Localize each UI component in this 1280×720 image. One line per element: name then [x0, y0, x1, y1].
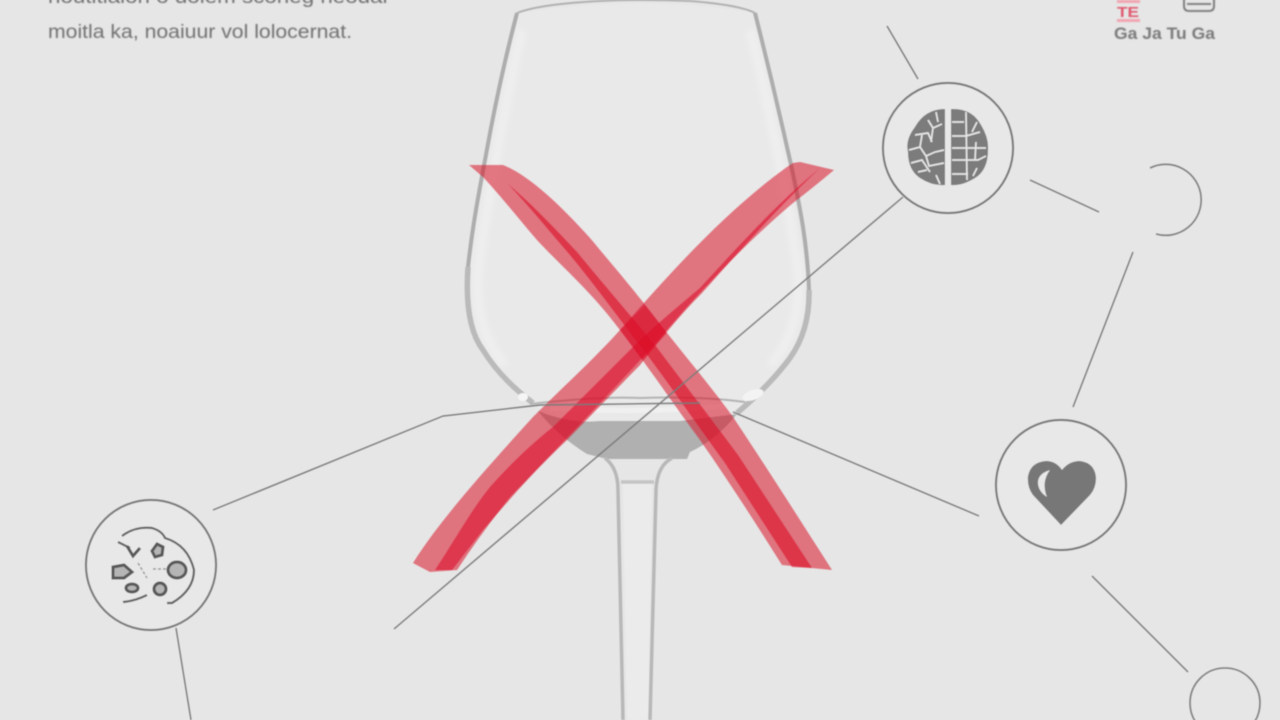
stem collar	[621, 480, 654, 484]
bowl left lower wall	[467, 267, 533, 403]
bowl inner glow right	[750, 30, 798, 365]
stem left edge	[605, 458, 623, 720]
icon: heart	[996, 420, 1126, 550]
wine residue	[538, 411, 737, 459]
heart circle	[996, 420, 1126, 550]
connector lines	[176, 26, 1188, 720]
gut centre	[138, 563, 166, 578]
gut outline	[118, 528, 194, 603]
bowl right lower wall	[737, 290, 809, 413]
bowl rim	[517, 0, 755, 13]
icon: gut flora	[86, 500, 216, 630]
intro text block: moitla ka, noaiuur vol lolocernat.	[48, 22, 352, 43]
glass stem	[623, 484, 652, 720]
bottom circle node	[1190, 668, 1260, 720]
bowl inner glow left	[478, 30, 522, 365]
top-right legend	[1114, 0, 1216, 43]
stem right edge	[650, 458, 672, 720]
legend icon: red mark: TE	[1117, 4, 1139, 21]
red cross	[413, 162, 834, 572]
icon: brain	[883, 83, 1013, 213]
wine surface line	[530, 398, 745, 404]
heart highlight	[1038, 470, 1050, 497]
stroke: top-left to bottom-right	[469, 165, 832, 570]
heart shape	[1028, 461, 1096, 525]
intro text block	[48, 0, 391, 43]
legend icon: grey box	[1184, 0, 1214, 11]
bowl left wall	[468, 13, 517, 267]
gut clusters	[113, 544, 186, 595]
stroke: top-right to bottom-left	[413, 162, 834, 572]
stroke core: top-right to bottom-left	[435, 168, 820, 570]
brain folds	[909, 112, 986, 184]
crossing highlight	[620, 305, 667, 360]
glass bowl interior	[467, 4, 808, 458]
open circle node	[1150, 164, 1201, 235]
stroke core: top-left to bottom-right	[508, 184, 812, 568]
brain hemispheres	[907, 109, 945, 185]
bowl right wall	[755, 13, 809, 290]
brain circle	[883, 83, 1013, 213]
legend label: Ga Ja Tu Ga	[1114, 24, 1216, 43]
bowl highlights	[518, 393, 528, 401]
gut circle	[86, 500, 216, 630]
wine glass	[467, 0, 809, 720]
